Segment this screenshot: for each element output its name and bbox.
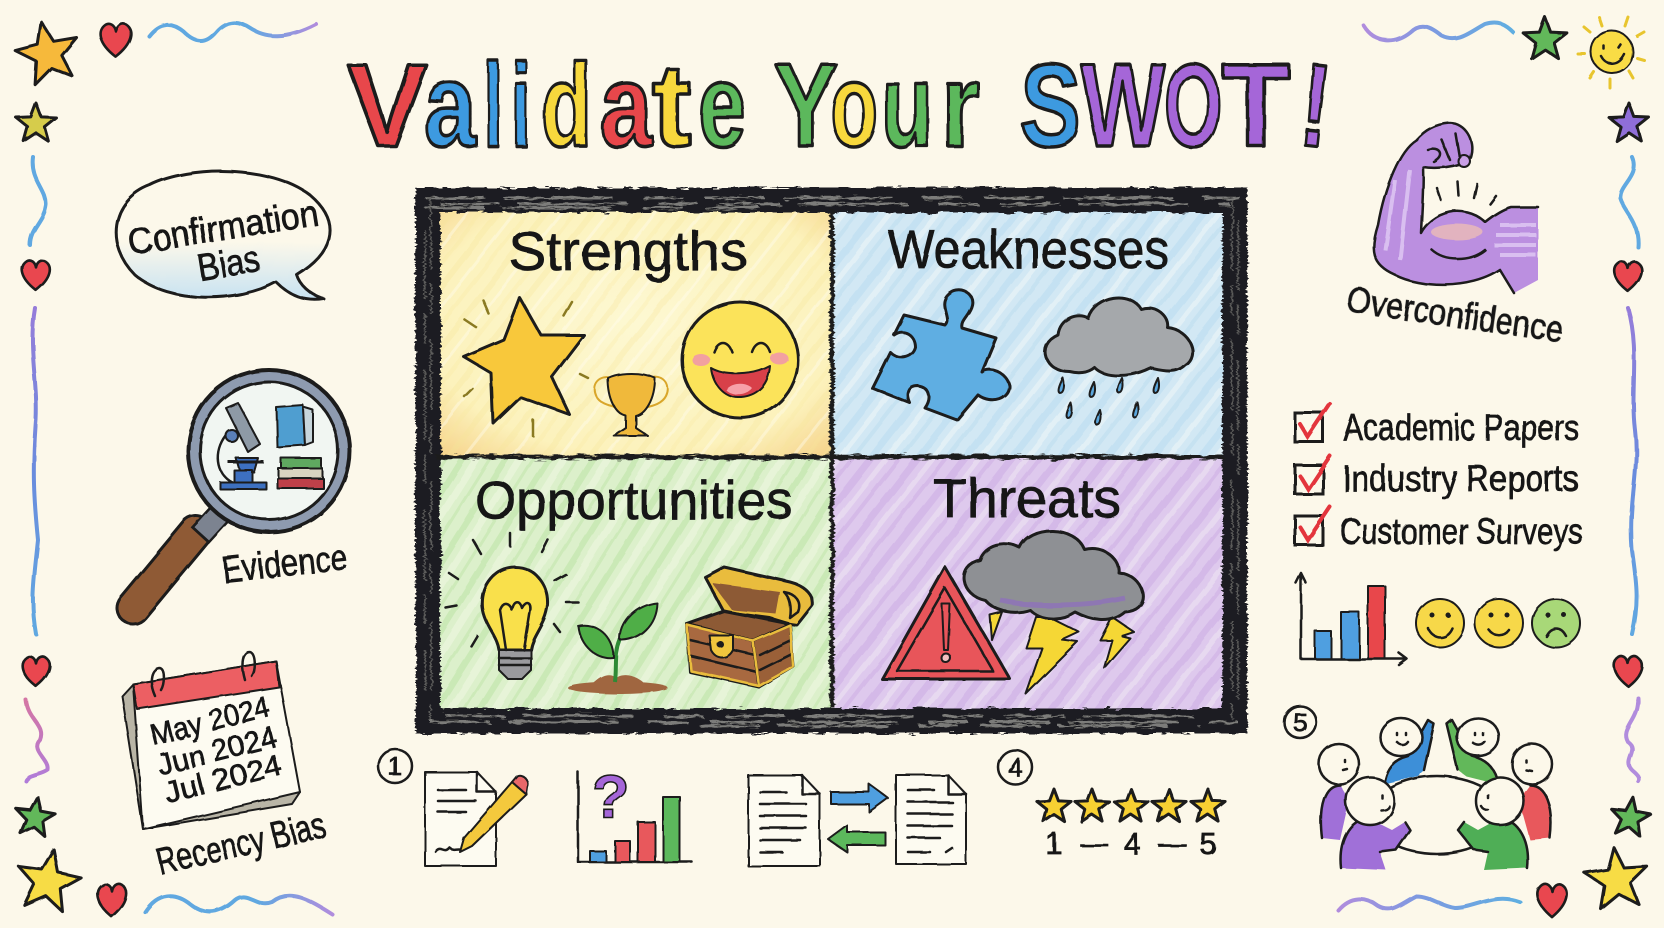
label: Evidence: Evidence	[220, 537, 349, 590]
title: !	[1295, 39, 1336, 173]
icon: laughing smiley	[682, 302, 798, 418]
title: o	[830, 40, 878, 172]
callout: confirmation bias speech bubble: Bias	[194, 238, 263, 289]
title: S	[1020, 40, 1081, 172]
title: i	[511, 40, 531, 172]
charcoal frame	[425, 198, 1240, 726]
title: a	[424, 40, 477, 172]
icon: calendar with dates: Jun 2024	[154, 721, 280, 782]
panel: strengths background	[436, 209, 834, 459]
icon: puzzle piece	[872, 290, 1009, 420]
icon: sprout in soil	[568, 603, 668, 694]
icon: calendar with dates: Jul 2024	[161, 749, 285, 810]
book stack	[277, 458, 323, 488]
item: Industry Reports: Industry Reports	[1342, 458, 1579, 499]
title: u	[881, 40, 933, 172]
icon: warning triangle	[882, 567, 1010, 679]
step 1: draft document with pencil	[378, 749, 528, 866]
label: Recency Bias: Recency Bias	[152, 804, 329, 883]
title: r	[941, 40, 980, 172]
heading: Threats: Threats	[933, 467, 1121, 529]
bar chart: survey results	[1296, 573, 1407, 665]
step 5: team discussing around a table: 5	[1293, 707, 1307, 737]
step 1: draft document with pencil: 1	[388, 751, 402, 781]
title: d	[541, 40, 592, 172]
icon: storm cloud with lightning	[964, 531, 1143, 694]
decorative border: right and bottom	[1338, 17, 1653, 917]
item: Academic Papers: Academic Papers	[1343, 407, 1579, 448]
title: O	[1164, 40, 1222, 172]
heading: Weaknesses: Weaknesses	[888, 218, 1169, 280]
step 5: team discussing around a table	[1284, 706, 1552, 870]
blue book	[276, 405, 313, 447]
panel: weaknesses background	[832, 209, 1226, 459]
title: W	[1081, 40, 1165, 172]
item: Customer Surveys	[1295, 507, 1583, 552]
icon: magnifying glass with evidence	[133, 370, 350, 608]
step 4: five star rating: 4	[1008, 752, 1022, 782]
step 2: bar chart with question mark: ?	[591, 763, 629, 832]
icon: rain cloud	[1045, 298, 1192, 425]
decorative border: left and top	[10, 15, 332, 917]
item: Customer Surveys: Customer Surveys	[1340, 511, 1583, 552]
step 4: five star rating: 4	[1123, 826, 1141, 861]
step 4: five star rating: 5	[1199, 826, 1217, 861]
step 4: five star rating: —	[1158, 827, 1186, 858]
title: Y	[774, 40, 838, 172]
label: Overconfidence: Overconfidence	[1344, 279, 1566, 350]
icon: open treasure chest	[687, 567, 812, 687]
step 2: bar chart with question mark	[578, 763, 692, 862]
icon: trophy	[594, 374, 668, 436]
microscope	[218, 403, 266, 489]
icon: smiling sun	[1578, 17, 1644, 88]
SWOT matrix	[425, 198, 1240, 726]
step 3: compare documents	[748, 775, 966, 866]
checklist: evidence sources	[1295, 404, 1583, 552]
item: Academic Papers	[1295, 404, 1579, 448]
icon: light bulb	[446, 533, 578, 679]
title: l	[483, 40, 503, 172]
icon: gold star with sparkles	[464, 298, 588, 436]
title: T	[1222, 40, 1290, 172]
callout: confirmation bias speech bubble: Confirmation	[125, 192, 321, 263]
callout: confirmation bias speech bubble	[116, 171, 330, 300]
step 4: five star rating: 1	[1045, 826, 1063, 861]
icon: calendar with dates: May 2024	[147, 691, 273, 752]
title: a	[600, 40, 653, 172]
step 4: five star rating: —	[1080, 827, 1108, 858]
title: t	[652, 40, 692, 172]
icons: satisfaction faces	[1416, 599, 1580, 647]
title: V	[347, 40, 427, 172]
heading: Strengths: Strengths	[509, 220, 748, 282]
panel: opportunities background	[436, 457, 834, 711]
heading: Opportunities: Opportunities	[475, 469, 793, 531]
icon: calendar with dates	[122, 652, 300, 829]
title	[347, 39, 1336, 173]
icon: flexed purple arm	[1374, 123, 1538, 293]
panel: threats background	[832, 457, 1226, 711]
title: e	[698, 40, 746, 172]
step 4: five star rating	[998, 750, 1225, 861]
